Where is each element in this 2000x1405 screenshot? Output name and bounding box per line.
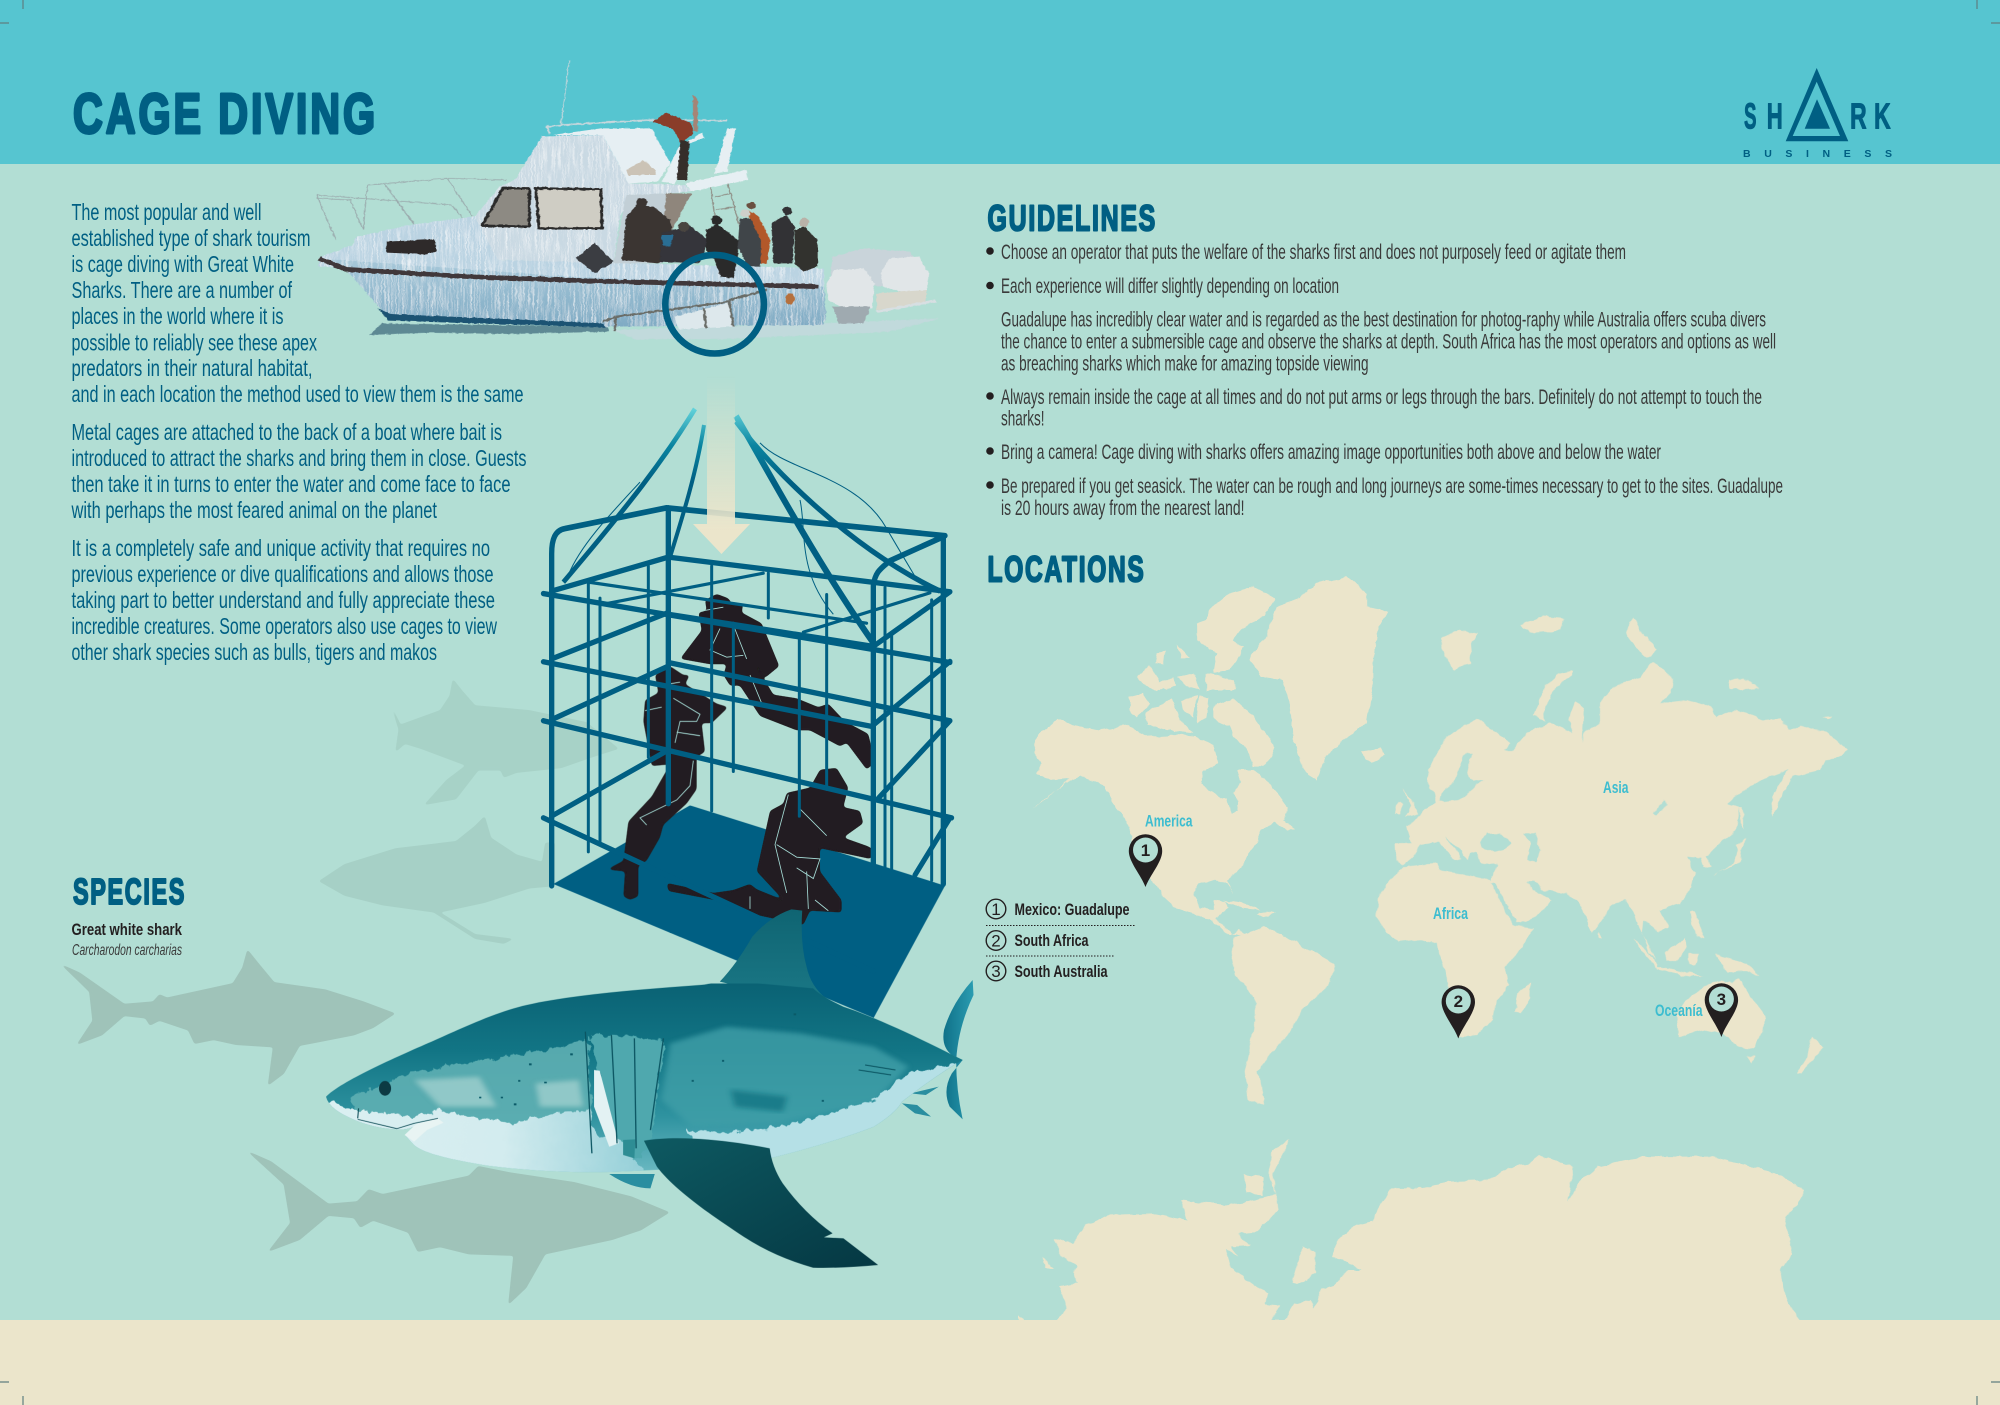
boat hull xyxy=(319,258,826,327)
map region labels: Oceanía xyxy=(1655,1001,1703,1020)
intro text: It is a completely safe and unique activity that requires no xyxy=(72,535,490,561)
locations legend xyxy=(986,899,1136,981)
shadow shark: left xyxy=(61,949,395,1086)
guidelines list: Bring a camera! Cage diving with sharks offers amazing image opportunities both above and below the water xyxy=(1001,441,1661,464)
map pin 2 xyxy=(1442,985,1475,1038)
intro text: and in each location the method used to view them is the same xyxy=(72,381,524,407)
logo wordmark: H xyxy=(1767,96,1783,137)
boat fender xyxy=(785,293,795,305)
logo wordmark xyxy=(1743,96,1892,160)
boat cage at waterline xyxy=(603,290,767,332)
Eurasia, Africa, Oceania xyxy=(1377,617,1848,1073)
guidelines list: Each experience will differ slightly depending on location xyxy=(1001,275,1339,298)
footer band xyxy=(0,1320,2000,1405)
intro text: The most popular and well xyxy=(72,199,262,225)
shark pectoral fin xyxy=(644,1138,878,1268)
boat cabin xyxy=(475,135,691,263)
world map xyxy=(1019,577,1848,1330)
intro text: previous experience or dive qualifications and allows those xyxy=(72,561,494,587)
logo wordmark: BUSINESS xyxy=(1743,148,1892,160)
cage bars xyxy=(543,508,952,971)
species name: Carcharodon carcharias xyxy=(72,942,182,959)
diver: kneeling xyxy=(667,768,877,925)
guidelines list: as breaching sharks which make for amazing topside viewing xyxy=(1001,352,1368,376)
locations legend: South Australia xyxy=(1014,962,1108,981)
locations legend: Mexico: Guadalupe xyxy=(1014,900,1130,919)
map pin 1: 1 xyxy=(1141,841,1150,860)
guidelines list: is 20 hours away from the nearest land! xyxy=(1001,497,1244,520)
intro text: other shark species such as bulls, tigers and makos xyxy=(72,639,437,665)
map region labels xyxy=(1145,778,1703,1020)
intro text: taking part to better understand and fully appreciate these xyxy=(72,587,495,613)
shark eye xyxy=(379,1081,391,1096)
intro text xyxy=(71,199,526,665)
locations legend: South Africa xyxy=(1014,931,1089,950)
logo wordmark: S xyxy=(1744,96,1756,137)
inland seas xyxy=(1440,753,1666,925)
map region labels: Asia xyxy=(1603,778,1629,797)
locations legend: 1 xyxy=(991,900,1001,919)
intro text: then take it in turns to enter the water and come face to face xyxy=(72,471,510,497)
shadow shark: middle xyxy=(319,816,555,944)
intro text: introduced to attract the sharks and bring them in close. Guests xyxy=(72,445,526,471)
shadow sharks xyxy=(61,679,670,1305)
logo triangle xyxy=(1786,68,1848,141)
boat foredeck xyxy=(319,217,824,290)
species name: Great white shark xyxy=(72,920,182,939)
title: CAGE DIVING xyxy=(73,82,378,146)
map pin 3: 3 xyxy=(1717,990,1726,1009)
locations legend: 3 xyxy=(991,962,1001,981)
boat windows xyxy=(482,188,602,228)
intro text: Metal cages are attached to the back of a boat where bait is xyxy=(72,419,502,445)
shark ventral fin xyxy=(609,1174,655,1188)
map pin 3 xyxy=(1705,983,1738,1037)
boat crew member on bridge xyxy=(653,95,698,180)
shark small fins xyxy=(902,1087,939,1117)
great white shark xyxy=(310,909,974,1268)
Greenland xyxy=(1250,577,1388,782)
intro text: with perhaps the most feared animal on the planet xyxy=(71,497,437,523)
Americas north: land and arctic islands xyxy=(1032,577,1388,935)
boat water line xyxy=(369,323,609,335)
locations legend: 2 xyxy=(991,932,1001,950)
intro text: places in the world where it is xyxy=(72,303,284,329)
shark tail xyxy=(943,980,974,1119)
arrow from boat to cage xyxy=(693,375,750,554)
shadow shark: top xyxy=(390,679,619,805)
boat deck opening xyxy=(614,193,691,263)
diver: left xyxy=(607,666,728,900)
logo: Shark Business xyxy=(1743,68,1892,160)
Iceland xyxy=(1362,748,1385,764)
boat stripe xyxy=(319,258,819,287)
guidelines list: Choose an operator that puts the welfare of the sharks first and does not purposely feed or agitate them xyxy=(1001,241,1626,264)
map region labels: Africa xyxy=(1433,904,1468,923)
diver: top xyxy=(680,594,875,770)
thin cage wires xyxy=(568,443,918,614)
boat xyxy=(317,60,940,339)
boat passengers xyxy=(576,198,818,278)
species name xyxy=(72,920,182,959)
heading: species: SPECIES xyxy=(73,871,186,912)
Antarctica xyxy=(1019,1140,1804,1330)
boat keel xyxy=(378,308,605,327)
intro text: possible to reliably see these apex xyxy=(72,330,317,356)
cage cables xyxy=(563,409,940,643)
heading: guidelines: GUIDELINES xyxy=(988,198,1157,238)
shadow shark: bottom xyxy=(247,1151,670,1305)
cage floor xyxy=(553,805,945,1018)
shark dorsal fin xyxy=(720,909,826,998)
South America xyxy=(1231,926,1335,1104)
guidelines list xyxy=(986,241,1783,520)
intro text: incredible creatures. Some operators also use cages to view xyxy=(72,613,497,639)
shark mouth xyxy=(358,1108,444,1142)
shark body xyxy=(326,984,963,1172)
boat bridge xyxy=(553,128,748,192)
intro text: established type of shark tourism xyxy=(72,225,310,251)
intro text: predators in their natural habitat, xyxy=(72,355,312,381)
Caribbean islands xyxy=(1223,900,1277,917)
logo wordmark: K xyxy=(1874,96,1891,137)
boat hull and cabin xyxy=(319,135,826,327)
guidelines list: sharks! xyxy=(1001,408,1044,430)
intro text: is cage diving with Great White xyxy=(72,251,294,277)
cage with divers xyxy=(543,409,952,1018)
map pin 1 xyxy=(1129,834,1162,887)
logo wordmark: R xyxy=(1850,96,1867,137)
heading: locations: LOCATIONS xyxy=(988,548,1146,590)
magnifier circle xyxy=(665,255,764,354)
map pin 2: 2 xyxy=(1454,992,1463,1011)
boat antenna and rails xyxy=(317,60,740,260)
header band xyxy=(0,0,2000,164)
map region labels: America xyxy=(1145,812,1193,830)
intro text: Sharks. There are a number of xyxy=(72,277,292,303)
boat engines xyxy=(826,248,936,323)
